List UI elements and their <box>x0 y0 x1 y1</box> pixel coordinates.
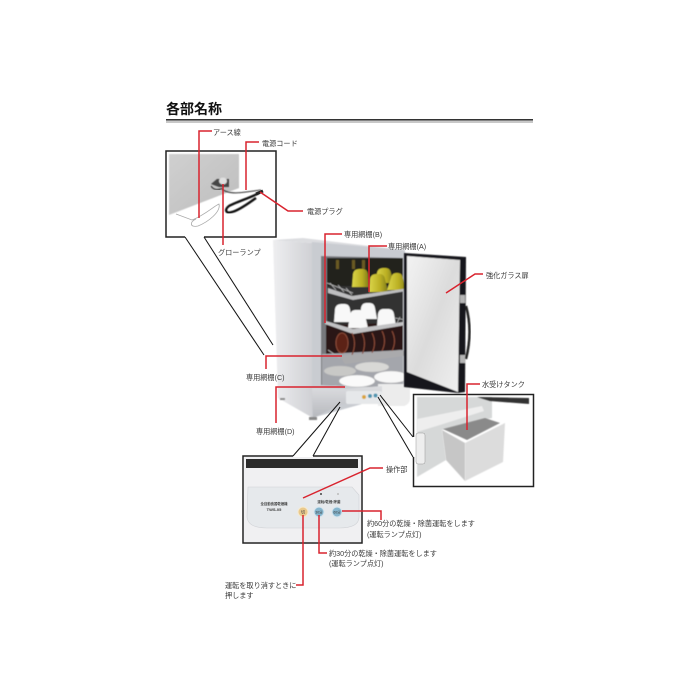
callout: cancel button: 押します <box>225 591 254 600</box>
control base <box>312 386 382 418</box>
panel label: 運転/乾燥·除菌 <box>317 499 341 504</box>
callout: power cord: 電源コード <box>262 139 298 148</box>
upper rack <box>328 288 412 300</box>
dark dishes <box>336 331 394 355</box>
control plate <box>247 487 359 528</box>
hinges <box>460 295 465 363</box>
door frame <box>404 253 466 393</box>
tank opening <box>443 418 500 440</box>
callout: rack C <box>246 356 342 382</box>
connector lines: rear inset to cabinet <box>185 237 273 355</box>
callout: water tank <box>467 380 525 430</box>
lower rack <box>340 350 410 364</box>
control plate <box>346 391 382 404</box>
callout: earth wire: アース線 <box>213 128 241 137</box>
callout: cancel button <box>225 515 303 600</box>
front frame <box>312 242 405 418</box>
panel: rear inset <box>166 151 276 237</box>
callout: tempered glass door <box>446 271 529 293</box>
callout: rack A: 専用網棚(A) <box>388 242 426 251</box>
callout: 60 minute button: 約60分の乾燥・除菌運転をします <box>367 519 475 528</box>
earth wire <box>176 204 219 226</box>
tank inset body <box>417 397 492 477</box>
model number: TWS-05 <box>267 507 282 512</box>
rear panel of cabinet <box>169 154 239 215</box>
callout: rack D: 専用網棚(D) <box>256 427 294 436</box>
cups: yellow <box>352 268 407 292</box>
callout: tempered glass door: 強化ガラス扉 <box>486 271 529 280</box>
top dark strip <box>477 397 529 404</box>
callout: rack C: 専用網棚(C) <box>246 373 284 382</box>
title: 各部名称 <box>166 101 222 117</box>
dark band <box>246 459 358 468</box>
product name: 全自動食器乾燥機 <box>260 501 288 506</box>
callout: control section: 操作部 <box>386 465 407 474</box>
cups: white <box>334 303 396 328</box>
callout: power plug <box>260 192 343 216</box>
title rule <box>166 119 533 122</box>
callout: 60 minute button: (運転ランプ点灯) <box>367 530 422 539</box>
glow lamp socket <box>211 178 229 190</box>
callout: rack B: 専用網棚(B) <box>344 230 382 239</box>
plates <box>324 362 408 387</box>
callout: 30 minute button: (運転ランプ点灯) <box>329 559 384 568</box>
door <box>404 253 470 393</box>
callout: cancel button: 運転を取り消すときに <box>225 581 296 590</box>
button: 60 minutes: 60分 <box>333 510 341 514</box>
control buttons <box>362 394 378 399</box>
feet <box>280 398 317 420</box>
tank side <box>442 430 465 481</box>
middle rack <box>325 320 418 334</box>
mini control plate <box>416 433 425 464</box>
callout: glow lamp <box>218 184 261 257</box>
button: 30 minutes: 30分 <box>315 510 323 514</box>
callout: control section <box>303 465 407 498</box>
interior <box>321 256 403 388</box>
handle <box>466 306 470 359</box>
lamp dots <box>320 493 339 495</box>
tank front <box>465 423 505 481</box>
connector lines: control to tank inset <box>378 395 413 457</box>
side panel <box>273 240 313 418</box>
callout: 30 minute button: 約30分の乾燥・除菌運転をします <box>329 549 437 558</box>
power cord <box>221 188 261 213</box>
plug <box>256 191 263 194</box>
top <box>273 238 404 250</box>
panel: control inset <box>243 456 362 543</box>
callout: 30 minute button <box>319 515 437 568</box>
callout: rack B <box>325 230 382 323</box>
callout: earth wire <box>199 128 241 218</box>
callout: water tank: 水受けタンク <box>482 380 525 389</box>
door glass <box>407 256 460 392</box>
callout: glow lamp: グローランプ <box>218 248 261 257</box>
callout: power cord <box>246 139 298 190</box>
panel: water tank inset <box>414 394 534 486</box>
button: cancel: 切 <box>301 508 305 514</box>
callout: rack D <box>256 387 345 436</box>
tank front <box>378 384 410 406</box>
connector lines: cabinet to control inset <box>293 402 340 456</box>
cabinet <box>273 238 420 420</box>
callout: power plug: 電源プラグ <box>307 207 343 216</box>
callout: 60 minute button <box>342 511 475 539</box>
bottles at back <box>336 260 365 269</box>
callout: rack A <box>369 242 426 292</box>
